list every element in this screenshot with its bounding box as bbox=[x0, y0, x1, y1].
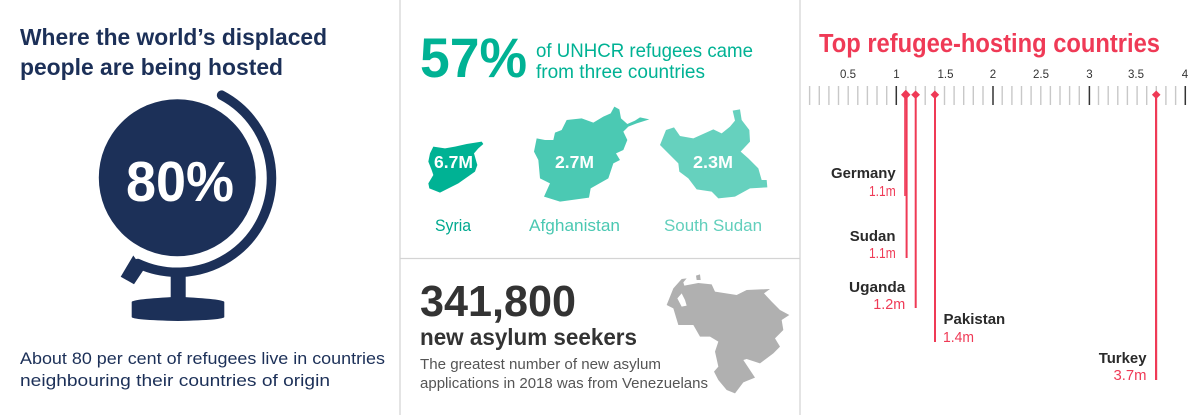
label: Sudan: 1.1m bbox=[869, 245, 896, 262]
text: UNHCR refugees note: of UNHCR refugees came bbox=[536, 40, 753, 62]
panel: top refugee-hosting countries bbox=[810, 30, 1189, 384]
panel: displaced people hosted bbox=[20, 24, 385, 390]
map: Syria: 6.7M bbox=[434, 152, 473, 172]
text: Venezuelan applications note: applications in 2018 was from Venezuelans bbox=[420, 375, 708, 392]
axis labels: 3 bbox=[1086, 69, 1093, 81]
axis labels: 3.5 bbox=[1128, 69, 1144, 81]
text: neighbouring countries note: About 80 per cent of refugees live in countries bbox=[20, 349, 385, 368]
heading: top refugee-hosting countries: Top refugee-hosting countries bbox=[819, 30, 1160, 58]
label: Sudan: Sudan bbox=[850, 228, 896, 245]
axis labels: 4 bbox=[1182, 69, 1189, 81]
axis labels bbox=[840, 69, 1189, 81]
text: Venezuelan applications note: The greatest number of new asylum bbox=[420, 356, 661, 373]
map: South Sudan bbox=[660, 109, 767, 198]
text: UNHCR refugees note bbox=[536, 40, 753, 83]
label: Germany: 1.1m bbox=[869, 183, 896, 200]
text: neighbouring countries note bbox=[20, 349, 385, 390]
axis labels: 1 bbox=[893, 69, 900, 81]
label: Syria: Syria bbox=[435, 217, 472, 235]
panel: new asylum seekers bbox=[420, 274, 789, 393]
label: Turkey: Turkey bbox=[1099, 350, 1147, 367]
marker: Germany 1.1m bbox=[901, 90, 910, 196]
axis labels: 2.5 bbox=[1033, 69, 1049, 81]
heading: where displaced people are hosted: Where the world’s displaced bbox=[20, 24, 327, 50]
label: Uganda bbox=[849, 279, 906, 313]
label: Afghanistan: Afghanistan bbox=[529, 217, 620, 235]
marker: Turkey 3.7m bbox=[1152, 90, 1160, 380]
label: Uganda: 1.2m bbox=[873, 296, 905, 313]
stat: 341,800: 341,800 bbox=[420, 277, 576, 326]
icon: globe with 80% bbox=[99, 95, 272, 321]
text: neighbouring countries note: neighbouring their countries of origin bbox=[20, 371, 330, 390]
heading: where displaced people are hosted: people are being hosted bbox=[20, 54, 283, 80]
chart: hosting countries on a scale in millions bbox=[810, 69, 1189, 380]
icon: globe with 80%: 80% bbox=[126, 150, 234, 214]
label: South Sudan: South Sudan bbox=[664, 217, 762, 235]
panel: 57% from three countries bbox=[420, 26, 767, 235]
marker: Pakistan 1.4m bbox=[931, 90, 939, 342]
label: Turkey bbox=[1099, 350, 1147, 384]
map: Syria bbox=[428, 142, 483, 193]
label: Uganda: Uganda bbox=[849, 279, 906, 296]
label: Sudan bbox=[850, 228, 896, 262]
map: South Sudan: 2.3M bbox=[693, 152, 733, 172]
axis labels: 0.5 bbox=[840, 69, 856, 81]
marker: Sudan 1.1m bbox=[902, 90, 910, 258]
map: Venezuela bbox=[667, 274, 789, 393]
stat: 57%: 57% bbox=[420, 26, 527, 89]
axis labels: 1.5 bbox=[938, 69, 954, 81]
text: Venezuelan applications note bbox=[420, 356, 708, 392]
label: Pakistan: 1.4m bbox=[943, 329, 974, 346]
map: Afghanistan: 2.7M bbox=[555, 152, 594, 172]
axis labels: 2 bbox=[990, 69, 996, 81]
map: Afghanistan bbox=[534, 107, 649, 202]
text: UNHCR refugees note: from three countries bbox=[536, 61, 705, 83]
label: Pakistan: Pakistan bbox=[944, 311, 1005, 328]
heading: where displaced people are hosted bbox=[20, 24, 327, 80]
label: Germany bbox=[831, 165, 896, 200]
label: Pakistan bbox=[943, 311, 1005, 346]
marker: Uganda 1.2m bbox=[911, 90, 920, 308]
subheading: new asylum seekers: new asylum seekers bbox=[420, 324, 637, 350]
label: Turkey: 3.7m bbox=[1114, 367, 1146, 384]
label: Germany: Germany bbox=[831, 165, 896, 182]
